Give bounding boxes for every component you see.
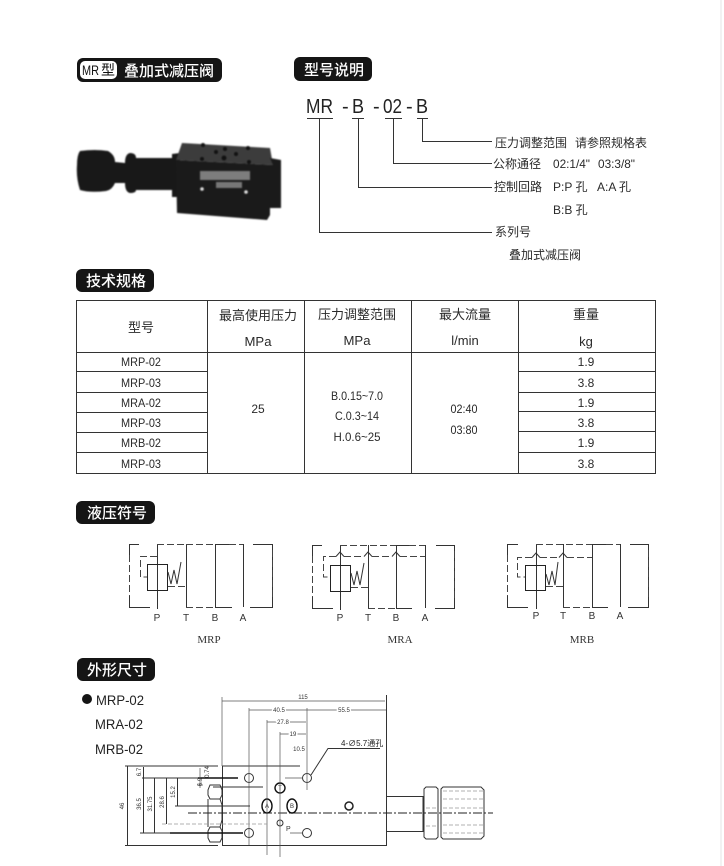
heading: 外形尺寸 bbox=[77, 658, 155, 681]
knob and stem bbox=[386, 787, 484, 839]
model code breakdown: A:A 孔 bbox=[597, 180, 631, 194]
port labels: P bbox=[286, 826, 291, 833]
model code breakdown: 叠加式减压阀 bbox=[509, 248, 581, 262]
hydraulic symbol: MRA: B bbox=[393, 613, 400, 624]
specification table: 3.8 bbox=[578, 457, 595, 471]
model list bbox=[82, 692, 144, 757]
specification table: 压力调整范围 bbox=[318, 307, 396, 322]
dimension values: 27.8 bbox=[277, 720, 289, 726]
specification table: 1.9 bbox=[578, 396, 595, 410]
specification table: 3.8 bbox=[578, 416, 595, 430]
model code breakdown: 控制回路 bbox=[494, 179, 542, 194]
specification table: MRP-03 bbox=[121, 457, 161, 471]
hydraulic symbol: MRB: B bbox=[589, 611, 596, 622]
photo: valve product bbox=[77, 143, 281, 220]
heading: 液压符号 bbox=[76, 501, 155, 524]
specification table: MPa bbox=[344, 333, 371, 348]
callout: 4-Ø5.7 through holes bbox=[311, 738, 383, 775]
model code breakdown: - bbox=[406, 96, 413, 118]
heading: 外形尺寸: 外形尺寸 bbox=[87, 662, 147, 679]
hydraulic symbol: MRA: T bbox=[365, 613, 371, 624]
hydraulic symbol: MRP bbox=[130, 544, 272, 646]
model list: MRB-02 bbox=[95, 741, 143, 757]
specification table: kg bbox=[579, 334, 593, 349]
model code breakdown: 公称通径 bbox=[493, 157, 541, 171]
model code breakdown: 02 bbox=[383, 96, 402, 118]
model code breakdown: B:B 孔 bbox=[553, 203, 588, 217]
hydraulic symbol: MRB: A bbox=[617, 611, 624, 622]
specification table: MRA-02 bbox=[121, 396, 161, 410]
dimension values: 15.2 bbox=[171, 786, 177, 798]
model code breakdown: MR bbox=[306, 96, 333, 118]
model code breakdown: B bbox=[416, 96, 428, 118]
model code breakdown: 03:3/8" bbox=[598, 157, 635, 171]
model list: MRA-02 bbox=[95, 716, 143, 732]
heading: 型号说明 bbox=[294, 57, 372, 81]
dimension values bbox=[120, 695, 350, 812]
model code breakdown: P:P 孔 bbox=[553, 180, 587, 194]
dimension values: 0.74 bbox=[205, 766, 211, 778]
specification table: MRP-02 bbox=[121, 355, 161, 369]
specification table: 25 bbox=[251, 402, 265, 416]
specification table bbox=[76, 300, 656, 474]
specification table: 型号 bbox=[128, 320, 154, 335]
specification table: C.0.3~14 bbox=[335, 409, 379, 423]
dimension values: 6.9 bbox=[198, 777, 204, 786]
model code breakdown: - bbox=[373, 96, 380, 118]
hydraulic symbol: MRA bbox=[312, 545, 454, 646]
hydraulic symbol: MRA: P bbox=[337, 613, 344, 624]
specification table: MRP-03 bbox=[121, 376, 161, 390]
dimension values: 46 bbox=[120, 802, 126, 809]
hydraulic symbol: MRP: MRP bbox=[197, 634, 221, 646]
model code breakdown: B bbox=[352, 96, 364, 118]
specification table: 1.9 bbox=[578, 436, 595, 450]
nut and side profile bbox=[208, 785, 222, 842]
specification table: 02:40 bbox=[450, 402, 478, 416]
dimension values: 19 bbox=[290, 732, 297, 738]
heading: 液压符号: 液压符号 bbox=[87, 505, 147, 522]
dimension values: 10.5 bbox=[293, 747, 305, 753]
hydraulic symbol: MRA: MRA bbox=[387, 634, 413, 646]
dimension values: 28.6 bbox=[160, 796, 166, 808]
model code breakdown bbox=[306, 96, 647, 262]
model list: MRP-02 bbox=[96, 692, 144, 708]
dimension values: 115 bbox=[298, 695, 308, 701]
valve body outline bbox=[222, 695, 386, 846]
heading: MR型 叠加式减压阀: MR bbox=[82, 62, 99, 78]
heading: 技术规格 bbox=[76, 269, 154, 292]
dimension lines bbox=[222, 697, 386, 857]
dimension values: 31.75 bbox=[148, 796, 154, 812]
specification table: l/min bbox=[451, 333, 479, 348]
hydraulic symbol: MRP: A bbox=[240, 613, 247, 624]
hydraulic symbol: MRB: MRB bbox=[570, 634, 594, 646]
heading: 型号说明: 型号说明 bbox=[304, 62, 364, 79]
model code breakdown: 压力调整范围 bbox=[495, 135, 567, 150]
port labels bbox=[265, 786, 294, 833]
outline dimension drawing bbox=[120, 695, 493, 857]
heading: MR型 叠加式减压阀: 型 bbox=[101, 62, 115, 78]
model code breakdown: 02:1/4" bbox=[553, 157, 590, 171]
hydraulic symbol: MRA: A bbox=[422, 613, 429, 624]
specification table: 最高使用压力 bbox=[219, 308, 297, 323]
hydraulic symbol: MRB: T bbox=[560, 611, 566, 622]
heading: MR型 叠加式减压阀 bbox=[77, 58, 222, 82]
port labels: A bbox=[265, 804, 269, 810]
model code breakdown: 请参照规格表 bbox=[575, 135, 647, 150]
specification table: 1.9 bbox=[578, 355, 595, 369]
specification table: H.0.6~25 bbox=[334, 430, 381, 444]
dimension values: 40.5 bbox=[273, 708, 285, 714]
hydraulic symbol: MRP: P bbox=[154, 613, 161, 624]
specification table: B.0.15~7.0 bbox=[331, 389, 383, 403]
specification table: MRB-02 bbox=[121, 436, 161, 450]
heading: MR型 叠加式减压阀: 叠加式减压阀 bbox=[124, 63, 214, 80]
centre line bbox=[188, 812, 493, 814]
mounting holes bbox=[244, 774, 353, 838]
specification table: MRP-03 bbox=[121, 416, 161, 430]
heading: 技术规格: 技术规格 bbox=[86, 273, 146, 290]
hydraulic symbol: MRP: T bbox=[183, 613, 189, 624]
dimension values: 6.7 bbox=[137, 767, 143, 776]
dimension values: 55.5 bbox=[338, 708, 350, 714]
callout: 4-Ø5.7 through holes: 4-∅5.7通孔 bbox=[341, 738, 383, 748]
model code breakdown: - bbox=[342, 96, 349, 118]
port labels: T bbox=[278, 786, 282, 792]
specification table: 03:80 bbox=[450, 423, 478, 437]
hydraulic symbol: MRP: B bbox=[212, 613, 219, 624]
port labels: B bbox=[290, 804, 294, 810]
specification table: MPa bbox=[244, 334, 272, 349]
model code breakdown: 系列号 bbox=[495, 225, 531, 239]
specification table: 重量 bbox=[573, 307, 599, 322]
specification table: 最大流量 bbox=[439, 307, 491, 322]
hydraulic symbol: MRB bbox=[508, 544, 648, 646]
dimension values: 36.5 bbox=[137, 798, 143, 810]
hydraulic symbol: MRB: P bbox=[533, 611, 540, 622]
specification table: 3.8 bbox=[578, 376, 595, 390]
